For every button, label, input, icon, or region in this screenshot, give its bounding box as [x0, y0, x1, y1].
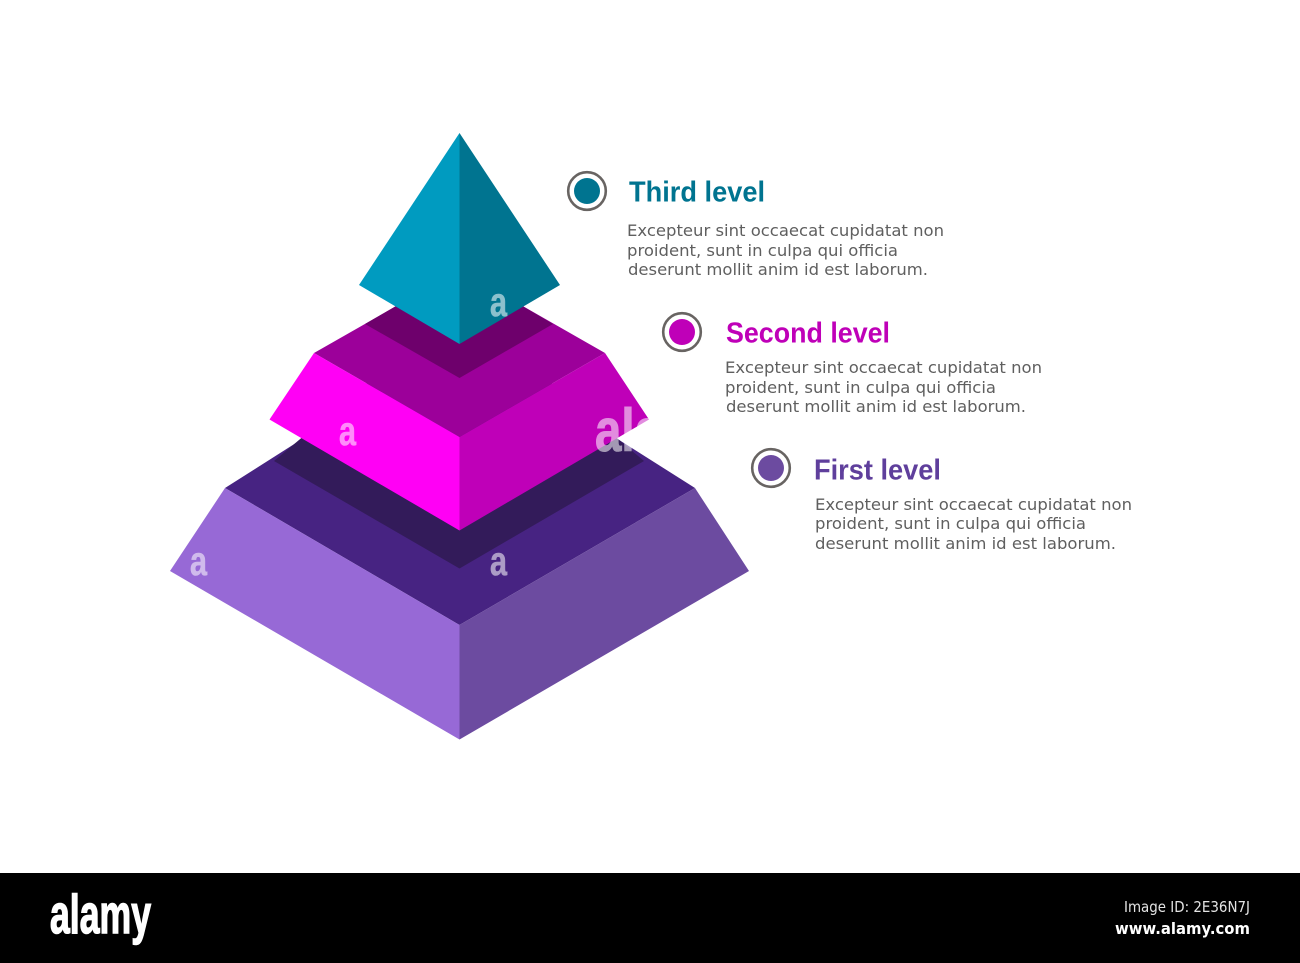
image id: Image ID: 2E36N7J: [1124, 898, 1250, 916]
website: www.alamy.com: [1115, 919, 1250, 938]
first level label: [752, 449, 1132, 553]
first level text: deserunt mollit anim id est laborum.: [815, 534, 1116, 553]
first level text: proident, sunt in culpa qui officia: [815, 514, 1086, 533]
third level marker: [568, 172, 606, 210]
watermark letters: a: [490, 538, 508, 584]
second level text: proident, sunt in culpa qui officia: [725, 378, 996, 397]
footer logo: alamy: [50, 883, 151, 945]
second level marker: [663, 313, 701, 351]
first level marker: [752, 449, 790, 487]
watermark letters: a: [190, 538, 208, 584]
watermark letters: [190, 279, 661, 584]
second level text: Excepteur sint occaecat cupidatat non: [725, 358, 1042, 377]
second level block: [270, 269, 649, 530]
second level label: [663, 313, 1042, 416]
third level label: [568, 172, 944, 279]
first level block: [170, 305, 749, 740]
first level text: [815, 495, 1132, 553]
second level text: [725, 358, 1042, 416]
third level text: Excepteur sint occaecat cupidatat non: [627, 221, 944, 240]
first level text: Excepteur sint occaecat cupidatat non: [815, 495, 1132, 514]
pyramid: [170, 133, 749, 740]
watermark letters: a: [339, 408, 357, 454]
second level heading: Second level: [726, 318, 890, 350]
footer bar: [0, 873, 1300, 963]
watermark letters: ala: [595, 397, 661, 464]
first level heading: First level: [814, 454, 941, 486]
second level text: deserunt mollit anim id est laborum.: [726, 397, 1026, 416]
third level text: deserunt mollit anim id est laborum.: [628, 260, 928, 279]
third level text: proident, sunt in culpa qui officia: [627, 241, 898, 260]
third level heading: Third level: [629, 176, 765, 208]
third level block: [359, 133, 560, 344]
watermark letters: a: [490, 279, 508, 325]
third level text: [627, 221, 944, 279]
